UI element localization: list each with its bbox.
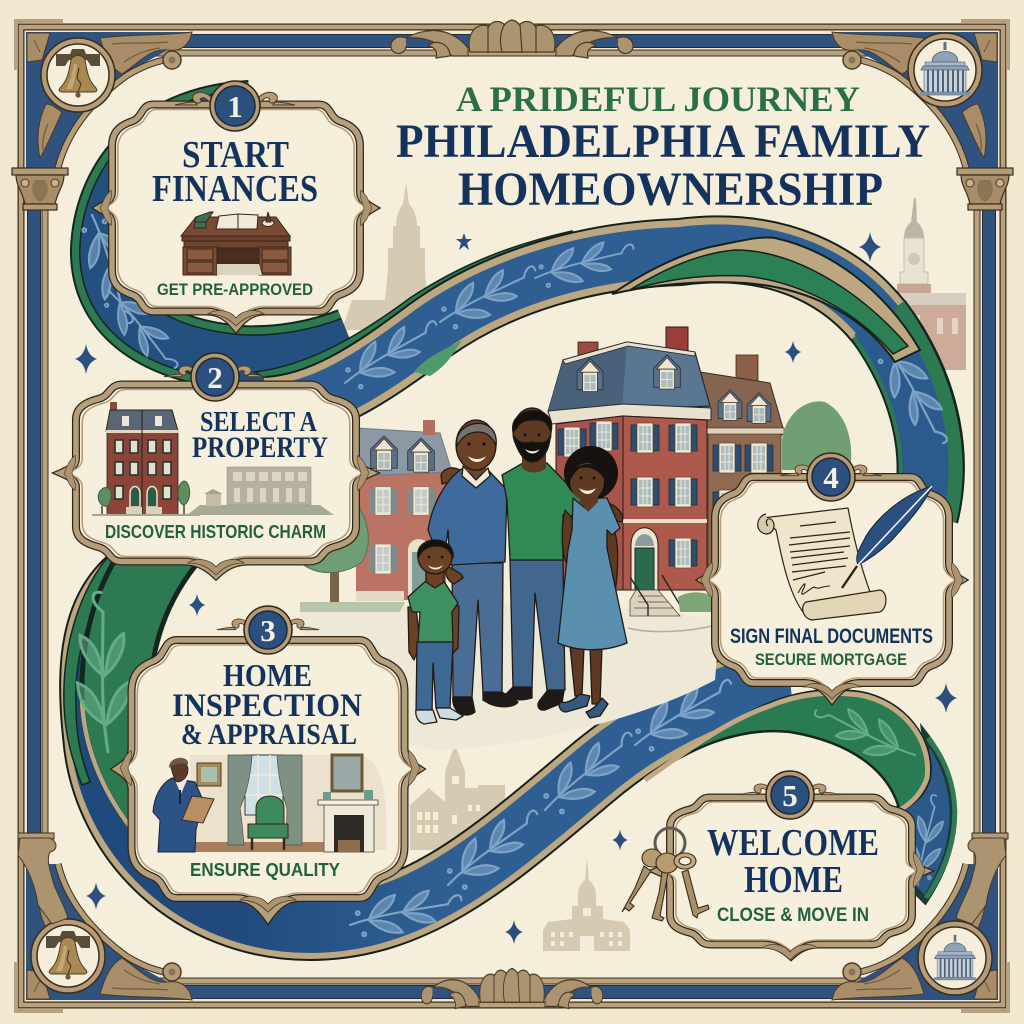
step number badge: 4 [823,460,839,495]
inspector [153,778,203,852]
ribbon upper: continuous arch band [265,232,931,515]
scene: left pale townhouse [298,420,452,612]
figure: father in blue sweater [428,420,518,715]
title: line 2: HOMEOWNERSHIP [458,163,883,216]
panel: step 3 home inspection and appraisal [117,606,420,919]
corner ornament: bottom-right with capitol [832,864,998,1000]
step number badge [217,606,319,654]
scene: main red-brick house [548,327,716,632]
step number badge: 5 [782,778,798,813]
ribbon lower left: green inner crescent [74,555,202,845]
subheading: SECURE MORTGAGE [755,650,907,669]
icon: rowhouses with grey hall [92,402,334,515]
heading: HOME [223,657,312,693]
ribbon lower: continuous band from left bend to card 4 [95,565,790,943]
ribbon upper: green fold [612,237,920,362]
front door [631,528,658,590]
panel: step 1 start finances [99,81,373,328]
ribbon upper: tapered green rim of diagonal [255,231,572,400]
small trees [98,481,190,506]
top centre ornament [391,20,633,58]
ribbon upper: right section with green rim [869,320,959,516]
ribbon lower left: green outer rim [64,552,124,785]
roof [548,342,710,412]
panel: step 2 select a property [61,353,371,576]
step number badge: 3 [260,613,276,648]
figure: woman in blue dress [558,446,627,718]
figure: young boy [408,540,463,724]
armchair [256,796,284,825]
corner ornament: bottom-left with bell [26,864,192,1000]
step number badge [739,771,841,819]
panel: step 5 welcome home: HOME [744,859,843,901]
ribbon tail: right blue curl [895,735,955,900]
cornice [548,404,711,424]
bottom centre ornament [421,969,603,1008]
step number badge [175,81,295,131]
step number badge: 2 [207,360,223,395]
heading: WELCOME [707,822,879,864]
decorative stars [75,232,957,944]
silhouette: clock tower hall [884,198,966,370]
figure: man in green sweater [502,408,623,710]
house body [356,470,446,600]
step number badge [780,453,882,501]
heading: SIGN FINAL DOCUMENTS [730,625,933,648]
subheading: GET PRE-APPROVED [157,280,313,299]
street tree [298,505,368,611]
panel: step 2 select a property: PROPERTY [192,431,328,464]
panel: step 4 sign final documents [701,453,963,699]
silhouette: church steeple [342,182,429,330]
silhouette: independence hall [543,858,630,951]
title: kicker: A PRIDEFUL JOURNEY [456,79,860,119]
house roof [356,428,452,476]
icon: writing desk [181,212,291,275]
heading: SELECT A [200,406,317,438]
icon: signed scroll [758,508,886,620]
heading: START [182,134,289,176]
family group [408,408,627,724]
title: line 1: PHILADELPHIA FAMILY [396,115,930,168]
corner ornament: top-left with bell [26,32,192,168]
ribbon upper left: green-edged arc [75,113,350,379]
panel: step 1 start finances: FINANCES [152,168,318,210]
brick walls [556,416,623,590]
panel: step 5 welcome home [657,771,925,960]
ribbon lower sweep [64,552,955,943]
illustration: inspector in parlour [153,755,386,852]
background tree [782,401,851,470]
corner ornament: top-right with capitol [832,32,998,168]
ribbon upper sweep [75,113,959,516]
step number badge: 1 [227,89,243,124]
subheading: DISCOVER HISTORIC CHARM [105,522,326,542]
silhouette: lower centre building [410,745,505,850]
ribbon tail: green fold [645,690,931,812]
icon: feather quill [842,486,932,588]
icon: bunch of keys [622,828,709,921]
panel: step 3 home inspection and appraisal: INSPECTION [172,688,362,724]
background landmark silhouettes [342,182,630,951]
column capitals [12,168,1013,924]
fireplace [318,800,378,805]
step number badge [164,353,266,401]
hedge [678,592,712,612]
subheading: ENSURE QUALITY [190,860,340,880]
front steps [630,590,680,616]
title block [396,79,930,216]
scene: brown townhouse [700,355,851,592]
panel: step 3 home inspection and appraisal: & APPRAISAL [181,718,357,751]
subheading: CLOSE & MOVE IN [717,905,869,926]
ground path [300,604,720,750]
